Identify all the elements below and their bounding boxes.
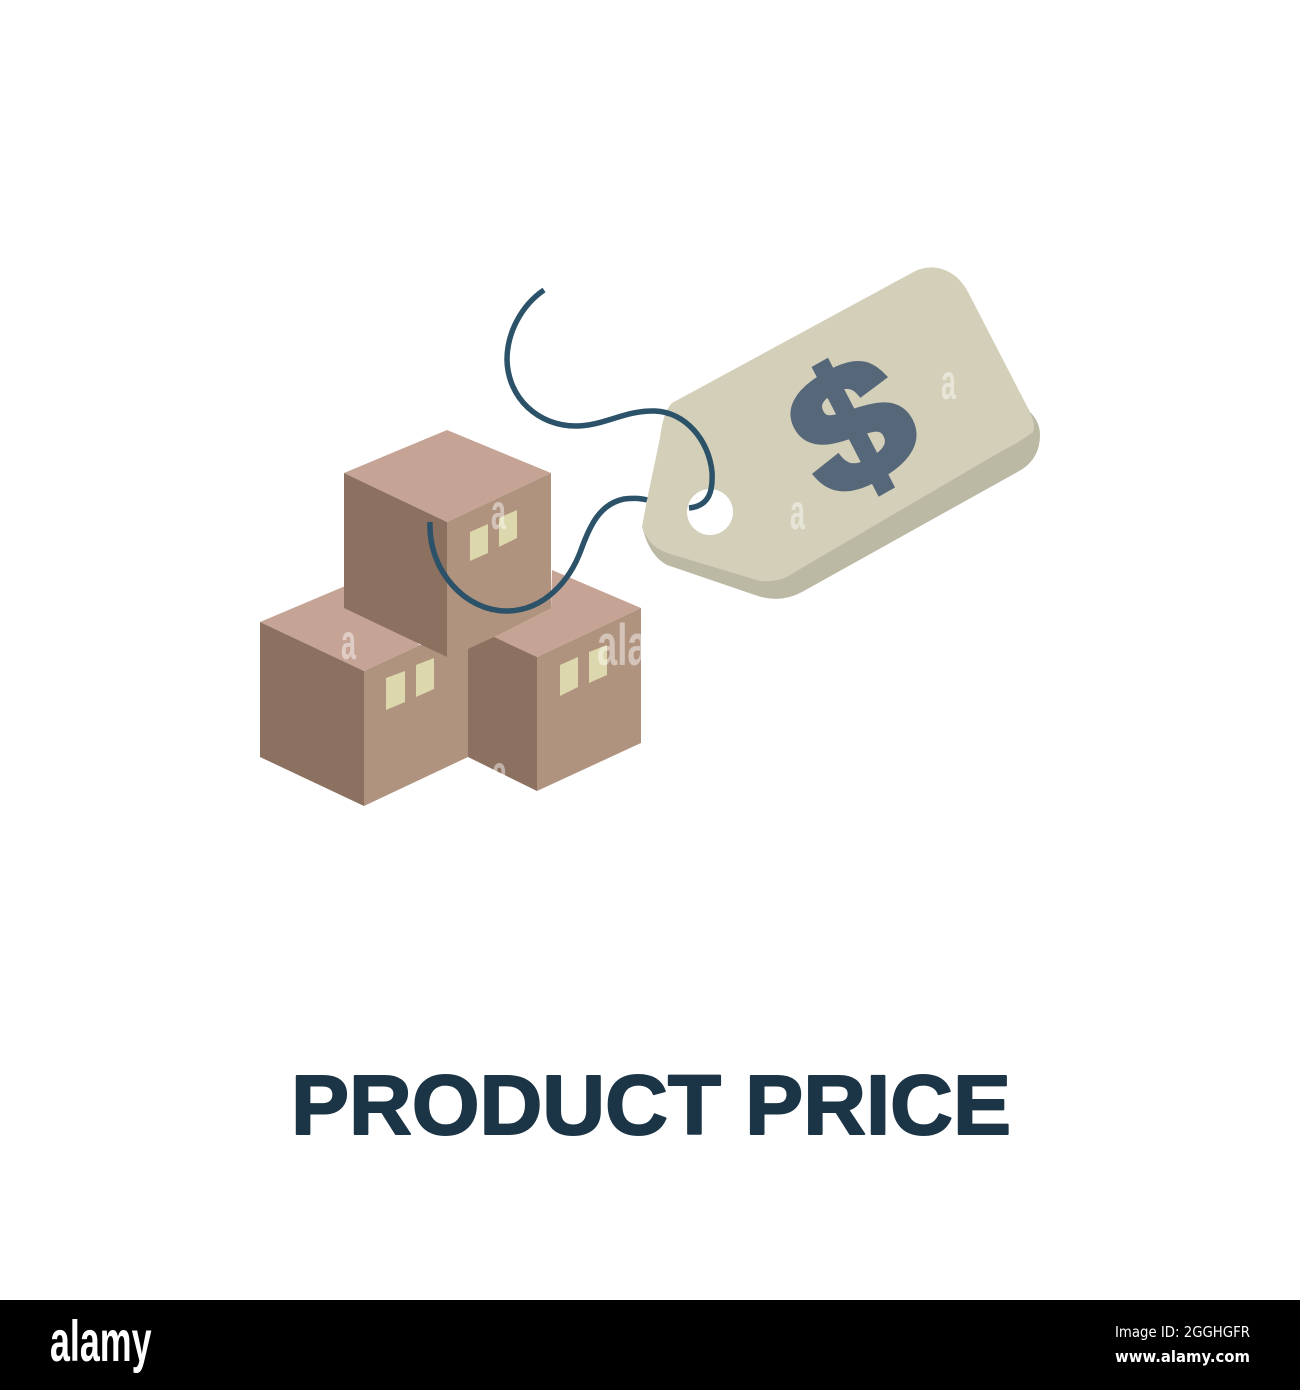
image id: Image ID: 2GGHGFR bbox=[1115, 1323, 1250, 1341]
watermark marks: ala bbox=[597, 613, 648, 678]
icon: stack of cardboard boxes bbox=[260, 430, 641, 806]
string bbox=[430, 290, 712, 611]
footer band bbox=[0, 1300, 1300, 1390]
watermark marks: a bbox=[341, 613, 356, 670]
site url: www.alamy.com bbox=[1115, 1347, 1250, 1366]
watermark marks: a bbox=[790, 483, 805, 540]
icon: price tag bbox=[642, 267, 1040, 599]
title: PRODUCT PRICE bbox=[291, 1058, 1011, 1152]
watermark marks: a bbox=[941, 353, 956, 410]
watermark marks: a bbox=[491, 483, 506, 540]
watermark marks: a bbox=[492, 744, 507, 801]
icon: dollar sign: $ bbox=[760, 314, 944, 538]
footer logo: alamy bbox=[50, 1310, 152, 1373]
watermark marks bbox=[341, 353, 956, 801]
